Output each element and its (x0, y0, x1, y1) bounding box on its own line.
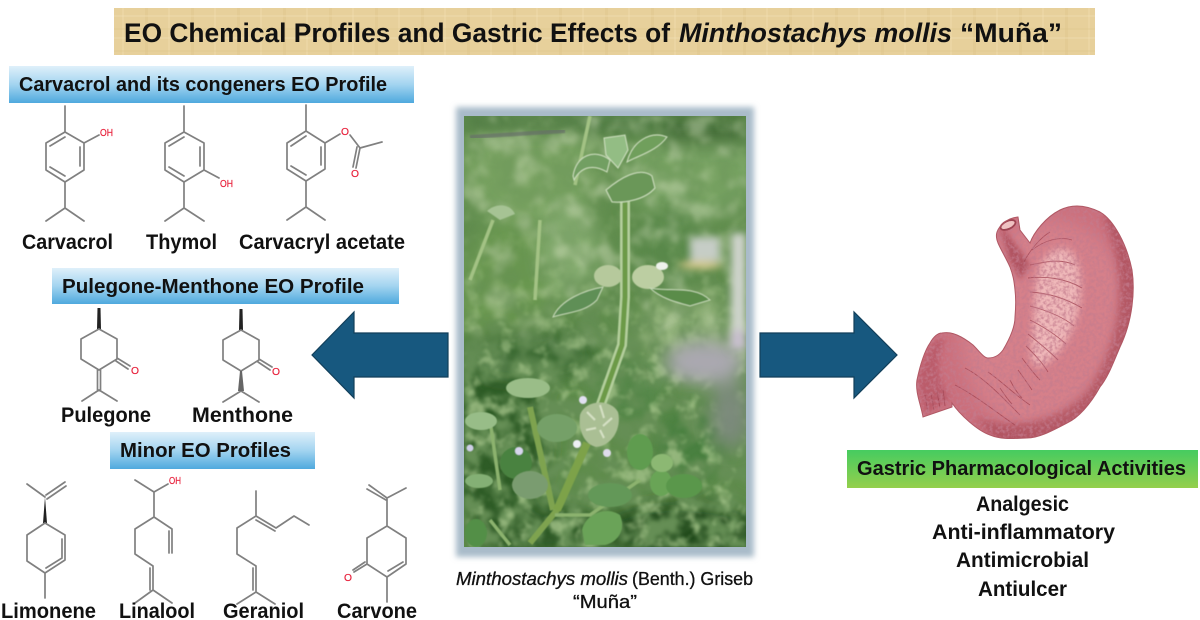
heading: pulegone-menthone profile: Pulegone-Menthone EO Profile (62, 276, 364, 298)
title banner (114, 8, 1095, 55)
molecule: carvacryl acetate (287, 105, 382, 220)
molecule: carvacryl acetate: O (351, 169, 359, 180)
photo caption: “Muña” (573, 592, 637, 612)
panel: pulegone-menthone profile (52, 268, 399, 427)
lower cluster (580, 403, 619, 447)
label: carvacryl acetate: Carvacryl acetate (239, 231, 405, 254)
heading: carvacrol profile (9, 66, 414, 103)
heading: minor profiles: Minor EO Profiles (120, 440, 291, 462)
photo: Minthostachys mollis plant (450, 107, 760, 558)
foliage texture (464, 116, 746, 373)
title banner: EO Chemical Profiles and Gastric Effects of (124, 18, 671, 48)
molecule: carvacryl acetate: O (341, 127, 349, 138)
heading: gastric pharmacological activities: Gastric Pharmacological Activities (857, 458, 1186, 480)
label: pulegone: Pulegone (61, 404, 151, 427)
heading: gastric pharmacological activities (847, 450, 1198, 488)
molecule: linalool (135, 476, 181, 603)
molecule: carvacrol (46, 106, 113, 221)
label: menthone: Menthone (192, 404, 293, 427)
label: carvacrol: Carvacrol (22, 231, 113, 254)
molecule: thymol: OH (220, 179, 233, 190)
heading: pulegone-menthone profile (52, 268, 399, 304)
panel: carvacrol profile (9, 66, 414, 254)
title banner: “Muña” (960, 18, 1062, 48)
molecule: pulegone (81, 308, 139, 401)
arrow: right to gastric effects (760, 312, 897, 398)
mid leaves (553, 287, 603, 317)
small flowers (515, 447, 523, 455)
background stems (470, 116, 590, 300)
heading: minor profiles (110, 432, 315, 469)
molecule: menthone: O (272, 367, 280, 378)
lower leaves (582, 511, 622, 545)
molecule: menthone (223, 309, 280, 402)
illustration: stomach (916, 206, 1134, 439)
molecule: thymol (165, 106, 233, 221)
list: gastric activities: Analgesic (976, 493, 1069, 516)
list: gastric activities (932, 493, 1115, 601)
list: gastric activities: Anti-inflammatory (932, 521, 1115, 544)
list: gastric activities: Antimicrobial (956, 549, 1089, 572)
molecule: limonene (27, 482, 66, 598)
title banner: Minthostachys mollis (679, 18, 952, 48)
upper leaves (573, 154, 610, 180)
arrow: left to chemical profiles (312, 312, 448, 398)
photo caption: Minthostachys mollis (456, 569, 628, 589)
photo caption: (Benth.) Griseb (632, 569, 753, 589)
main stem (600, 200, 625, 407)
flower clusters (594, 265, 622, 287)
molecule: carvacrol: OH (100, 128, 113, 139)
label: thymol: Thymol (146, 231, 217, 254)
molecule: geraniol (237, 491, 309, 604)
photo caption (456, 569, 753, 612)
heading: carvacrol profile: Carvacrol and its congeners EO Profile (19, 74, 387, 96)
molecule: pulegone: O (131, 366, 139, 377)
molecule: linalool: OH (169, 476, 181, 487)
list: gastric activities: Antiulcer (978, 578, 1067, 601)
molecule: carvone (344, 485, 406, 602)
panel: minor profiles (1, 432, 417, 620)
molecule: carvone: O (344, 573, 352, 584)
